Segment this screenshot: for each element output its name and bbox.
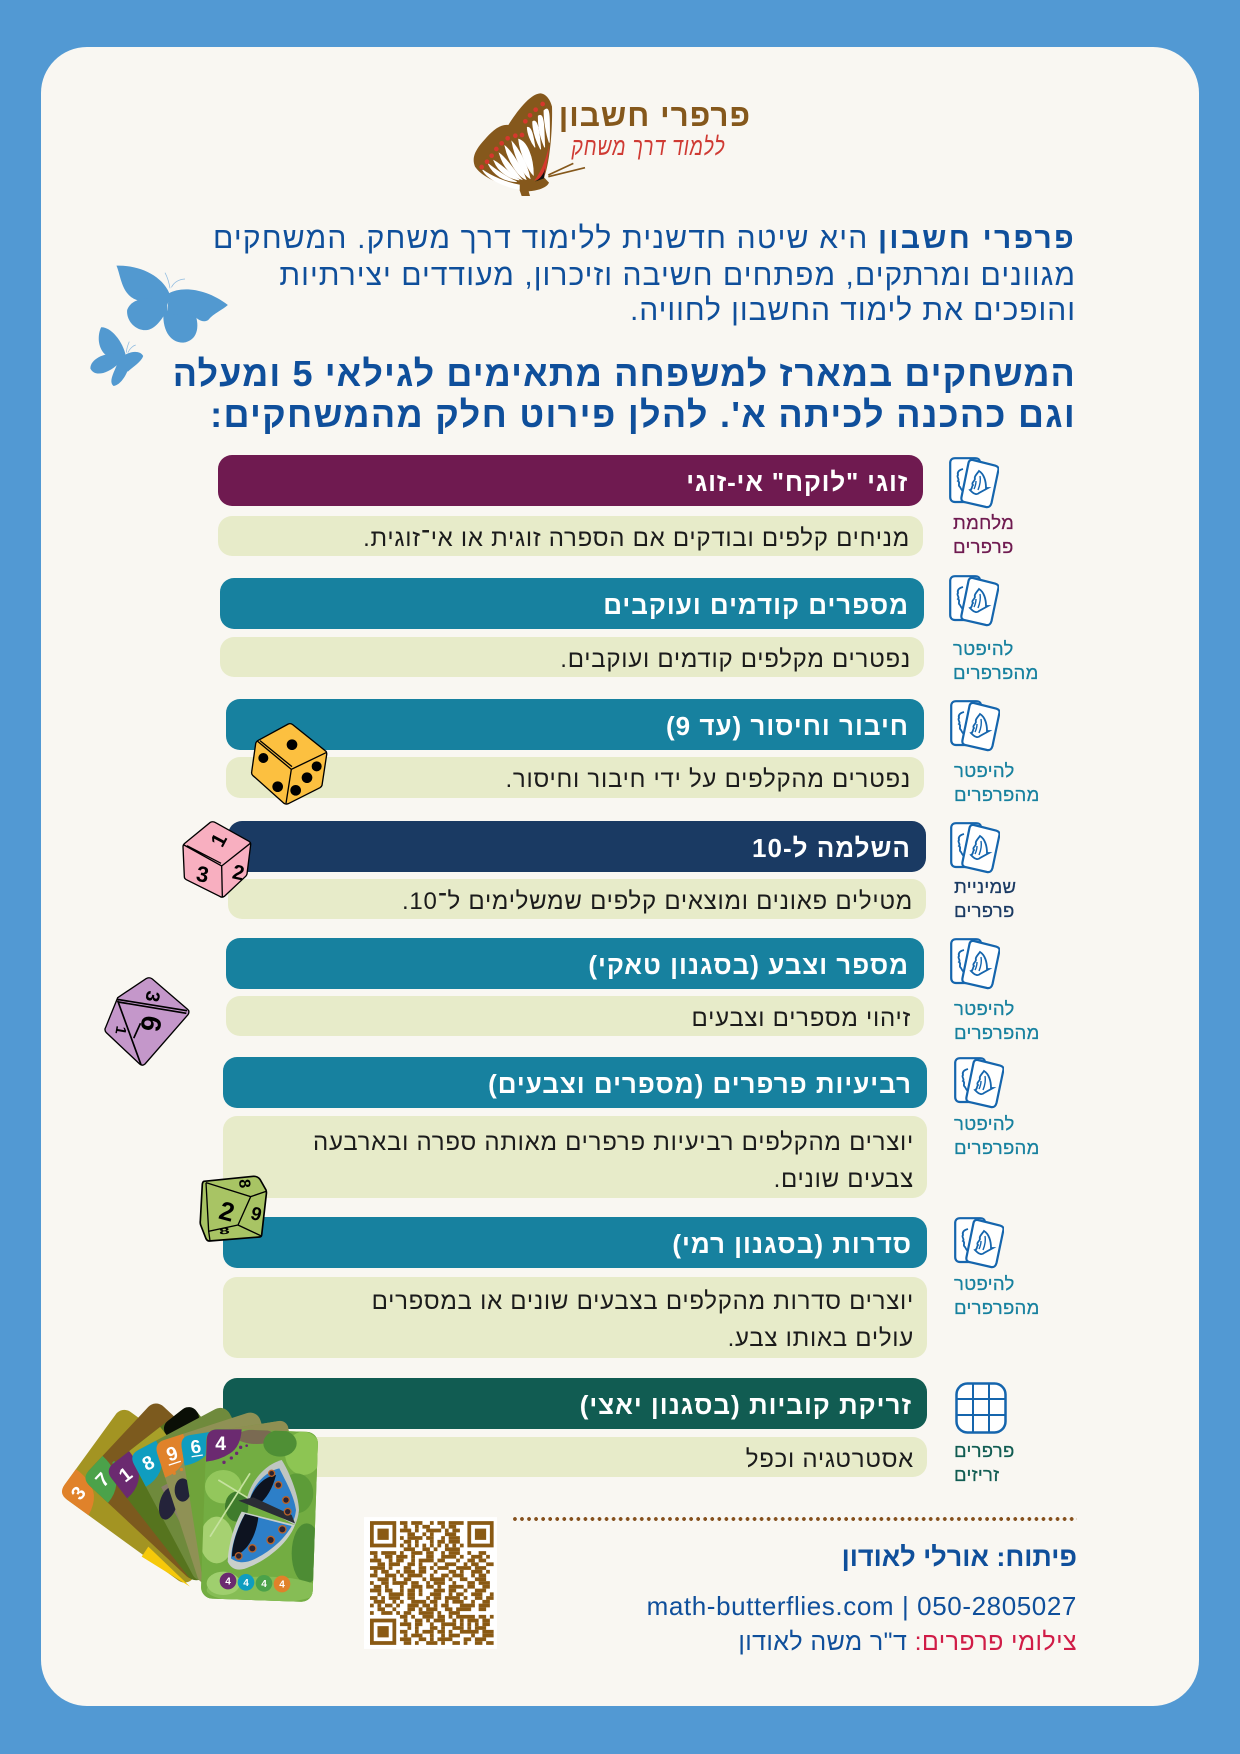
icon: small butterfly xyxy=(90,327,143,386)
icon: green die: 8 xyxy=(219,1226,230,1237)
intro line 3: והופכים את לימוד החשבון לחוויה. xyxy=(630,294,1076,327)
game 2 description xyxy=(220,637,924,677)
icon: pink die: 3 xyxy=(194,861,211,888)
game label xyxy=(954,1113,1040,1158)
icon: cards, להיפטר מהפרפרים xyxy=(954,1217,1040,1318)
game label: מהפרפרים xyxy=(953,662,1039,682)
game 5 description: זיהוי מספרים וצבעים xyxy=(692,1005,911,1032)
game 2 description: נפטרים מקלפים קודמים ועוקבים. xyxy=(560,646,911,673)
illustration: fan of game cards xyxy=(62,1404,318,1602)
game label: מהפרפרים xyxy=(954,1296,1040,1318)
game 1 description xyxy=(218,516,923,556)
game 6 description: צבעים שונים. xyxy=(774,1166,914,1193)
game 4 title xyxy=(228,821,926,872)
game 3 title: חיבור וחיסור (עד 9) xyxy=(666,711,909,741)
panel: game 5 xyxy=(226,938,924,1036)
game 1 description: מניחים קלפים ובודקים אם הספרה זוגית או אי־זוגית. xyxy=(363,525,910,552)
game 5 title: מספר וצבע (בסגנון טאקי) xyxy=(588,950,909,980)
card 6: 6 xyxy=(189,1435,203,1458)
game 6 description: יוצרים מהקלפים רביעיות פרפרים מאותה ספרה ובארבעה xyxy=(313,1129,914,1156)
game label: להיפטר xyxy=(954,1113,1015,1134)
card number dots: 4 xyxy=(279,1580,285,1591)
developer name: פיתוח: אורלי לאודון xyxy=(842,1542,1077,1572)
card 4: front card with blue butterfly: 4 xyxy=(215,1434,226,1455)
dotted divider xyxy=(513,1517,1077,1521)
butterfly on card 9 xyxy=(175,1478,191,1502)
game 4 title: השלמה ל-10 xyxy=(752,833,911,863)
game label: פרפרים xyxy=(953,536,1014,556)
icon: purple die: 6 xyxy=(134,1013,168,1034)
game label: זריזים xyxy=(954,1464,999,1484)
game 6 title xyxy=(223,1057,927,1108)
game 1 title xyxy=(218,455,923,506)
heading xyxy=(173,353,1076,435)
icon: pink die: 1 xyxy=(206,830,232,851)
game label: מהפרפרים xyxy=(954,784,1040,804)
icon: purple die: 3 xyxy=(140,989,163,1004)
icon: big butterfly xyxy=(116,266,228,343)
QR code xyxy=(364,1517,497,1649)
game label: מהפרפרים xyxy=(954,1022,1040,1042)
game 3 description: נפטרים מהקלפים על ידי חיבור וחיסור. xyxy=(505,766,911,793)
game label: להיפטר xyxy=(954,1273,1015,1294)
game 8 description xyxy=(223,1437,927,1477)
panel: game 8 xyxy=(223,1378,927,1477)
card 7: 7 xyxy=(92,1469,115,1491)
icon: cards, להיפטר מהפרפרים xyxy=(954,1057,1040,1158)
intro line 2: מגוונים ומרתקים, מפתחים חשיבה וזיכרון, מעודדים יצירתיות xyxy=(279,259,1076,292)
panel: game 3 xyxy=(226,699,924,798)
icon: green die: 8 xyxy=(235,1178,253,1189)
game 6 description xyxy=(223,1116,927,1198)
game 4 description: מטילים פאונים ומוצאים קלפים שמשלימים ל־10. xyxy=(402,888,913,915)
contact details: math-butterflies.com | 050-2805027 xyxy=(647,1591,1077,1621)
intro line 1: פרפרי חשבון היא שיטה חדשנית ללימוד דרך משחק. המשחקים xyxy=(213,222,1076,255)
card 3: 3 xyxy=(68,1483,91,1504)
icon: purple die xyxy=(104,977,190,1066)
card 6 xyxy=(180,1420,311,1589)
game label: מהפרפרים xyxy=(954,1136,1040,1158)
icon: cards, להיפטר מהפרפרים xyxy=(950,938,1040,1042)
card 1: 1 xyxy=(115,1464,137,1487)
game label: מלחמת xyxy=(953,512,1014,533)
icon: green die xyxy=(199,1176,268,1242)
card 8 xyxy=(129,1404,294,1584)
heading line 2: וגם כהכנה לכיתה א'. להלן פירוט חלק מהמשחקים: xyxy=(210,394,1076,435)
game 8 title xyxy=(223,1378,927,1429)
panel: game 1 xyxy=(218,455,923,556)
card 4: front card with blue butterfly xyxy=(198,1427,322,1607)
game 7 description: עולים באותו צבע. xyxy=(728,1325,914,1352)
intro paragraph xyxy=(213,222,1076,327)
game label: פרפרים xyxy=(954,1440,1015,1461)
game 8 title: זריקת קוביות (בסגנון יאצי) xyxy=(580,1390,912,1420)
icon: cards, שמיניית פרפרים xyxy=(950,822,1016,920)
game 7 title: סדרות (בסגנון רמי) xyxy=(672,1229,912,1259)
icon: pink die: 2 xyxy=(230,861,246,885)
card 9: 9 xyxy=(164,1443,181,1466)
decorative butterflies xyxy=(90,266,228,386)
game label xyxy=(953,512,1014,556)
card number dots: 4 xyxy=(225,1577,231,1588)
card 7 xyxy=(82,1399,268,1584)
game label xyxy=(953,638,1039,682)
photo credit: צילומי פרפרים: ד"ר משה לאודון xyxy=(738,1628,1077,1656)
card number dots: 4 xyxy=(261,1579,267,1590)
heading line 1: המשחקים במארז למשפחה מתאימים לגילאי 5 ומעלה xyxy=(173,353,1076,394)
game 3 description xyxy=(226,757,924,798)
game label: להיפטר xyxy=(953,638,1014,659)
game label: פרפרים xyxy=(954,900,1015,920)
icon: grid, פרפרים זריזים xyxy=(954,1382,1015,1484)
game 5 title xyxy=(226,938,924,989)
game label xyxy=(954,760,1040,804)
logo tagline: ללמוד דרך משחק xyxy=(571,133,725,161)
butterfly on card 8 xyxy=(156,1485,181,1522)
game 8 description: אסטרטגיה וכפל xyxy=(746,1446,914,1473)
panel: game 7 xyxy=(223,1217,927,1358)
logo xyxy=(474,93,751,196)
game label: להיפטר xyxy=(954,998,1015,1019)
card 3 xyxy=(58,1406,251,1587)
logo butterfly xyxy=(474,93,586,196)
card 9 xyxy=(154,1410,304,1587)
yellow flower strip xyxy=(142,1547,190,1587)
game 6 title: רביעיות פרפרים (מספרים וצבעים) xyxy=(488,1069,912,1099)
game 7 title xyxy=(223,1217,927,1268)
icon: green die: 2 xyxy=(216,1195,238,1228)
panel: game 4 xyxy=(228,821,926,919)
icon: cards, להיפטר מהפרפרים xyxy=(950,700,1040,804)
footer credits xyxy=(647,1542,1077,1656)
game 1 title: זוגי "לוקח" אי-זוגי xyxy=(686,467,908,497)
panel: game 6 xyxy=(223,1057,927,1198)
icon: purple die: 1 xyxy=(111,1025,129,1035)
game 7 description: יוצרים סדרות מהקלפים בצבעים שונים או במספרים xyxy=(372,1288,914,1315)
game 5 description xyxy=(226,996,924,1036)
card number dots xyxy=(220,1573,290,1592)
icon: orange die xyxy=(250,723,328,805)
panel: game 2 xyxy=(220,578,924,677)
logo title: פרפרי חשבון xyxy=(559,97,751,133)
game label xyxy=(954,1273,1040,1318)
game 7 description xyxy=(223,1277,927,1358)
icon: green die: 9 xyxy=(249,1202,264,1225)
icon: cards, להיפטר מהפרפרים xyxy=(949,575,1039,682)
game label xyxy=(954,876,1016,920)
blue butterfly xyxy=(228,1460,299,1570)
game label xyxy=(954,1440,1015,1484)
game label: להיפטר xyxy=(954,760,1015,781)
game 4 description xyxy=(228,879,926,919)
game 2 title: מספרים קודמים ועוקבים xyxy=(603,590,909,620)
game 3 title xyxy=(226,699,924,750)
icon: pink die xyxy=(182,821,252,898)
card 8: 8 xyxy=(139,1452,159,1476)
game 2 title xyxy=(220,578,924,629)
game label: שמיניית xyxy=(954,876,1016,897)
game label xyxy=(954,998,1040,1042)
card 1 xyxy=(105,1403,280,1585)
icon: cards, מלחמת פרפרים xyxy=(949,457,1014,556)
card number dots: 4 xyxy=(243,1578,249,1589)
